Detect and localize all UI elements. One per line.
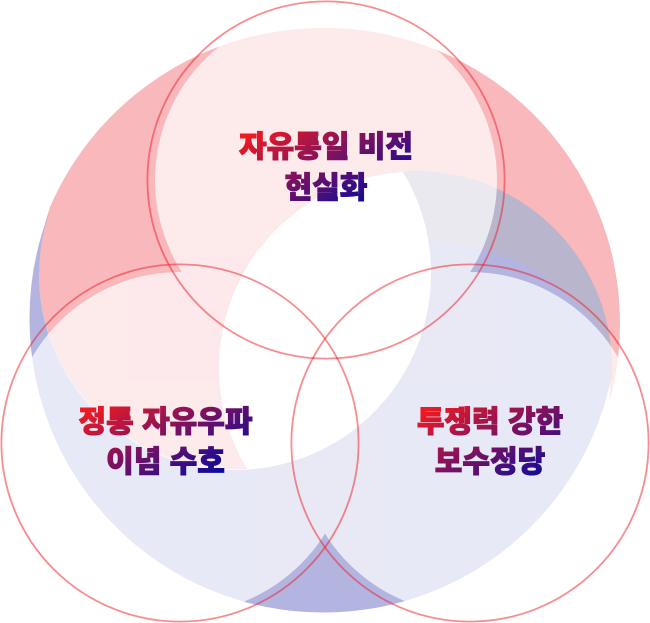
label: lower right circle: 투쟁력 강한	[417, 406, 563, 439]
label: lower right circle	[417, 406, 563, 479]
red swirl band	[39, 28, 620, 469]
circle outline: lower right	[291, 264, 649, 622]
label: top circle: 현실화	[285, 172, 367, 205]
label: lower left circle: 이념 수호	[106, 446, 225, 479]
label: lower left circle	[79, 406, 253, 479]
label: lower right circle: 보수정당	[435, 446, 545, 479]
label: lower left circle: 정통 자유우파	[79, 406, 253, 439]
label: top circle: 자유통일 비전	[239, 131, 413, 164]
circle outline: top	[147, 1, 505, 359]
label: top circle	[239, 131, 413, 205]
band overlap	[39, 188, 611, 346]
blue swirl band	[29, 171, 612, 613]
circle outline: lower left	[1, 264, 359, 622]
